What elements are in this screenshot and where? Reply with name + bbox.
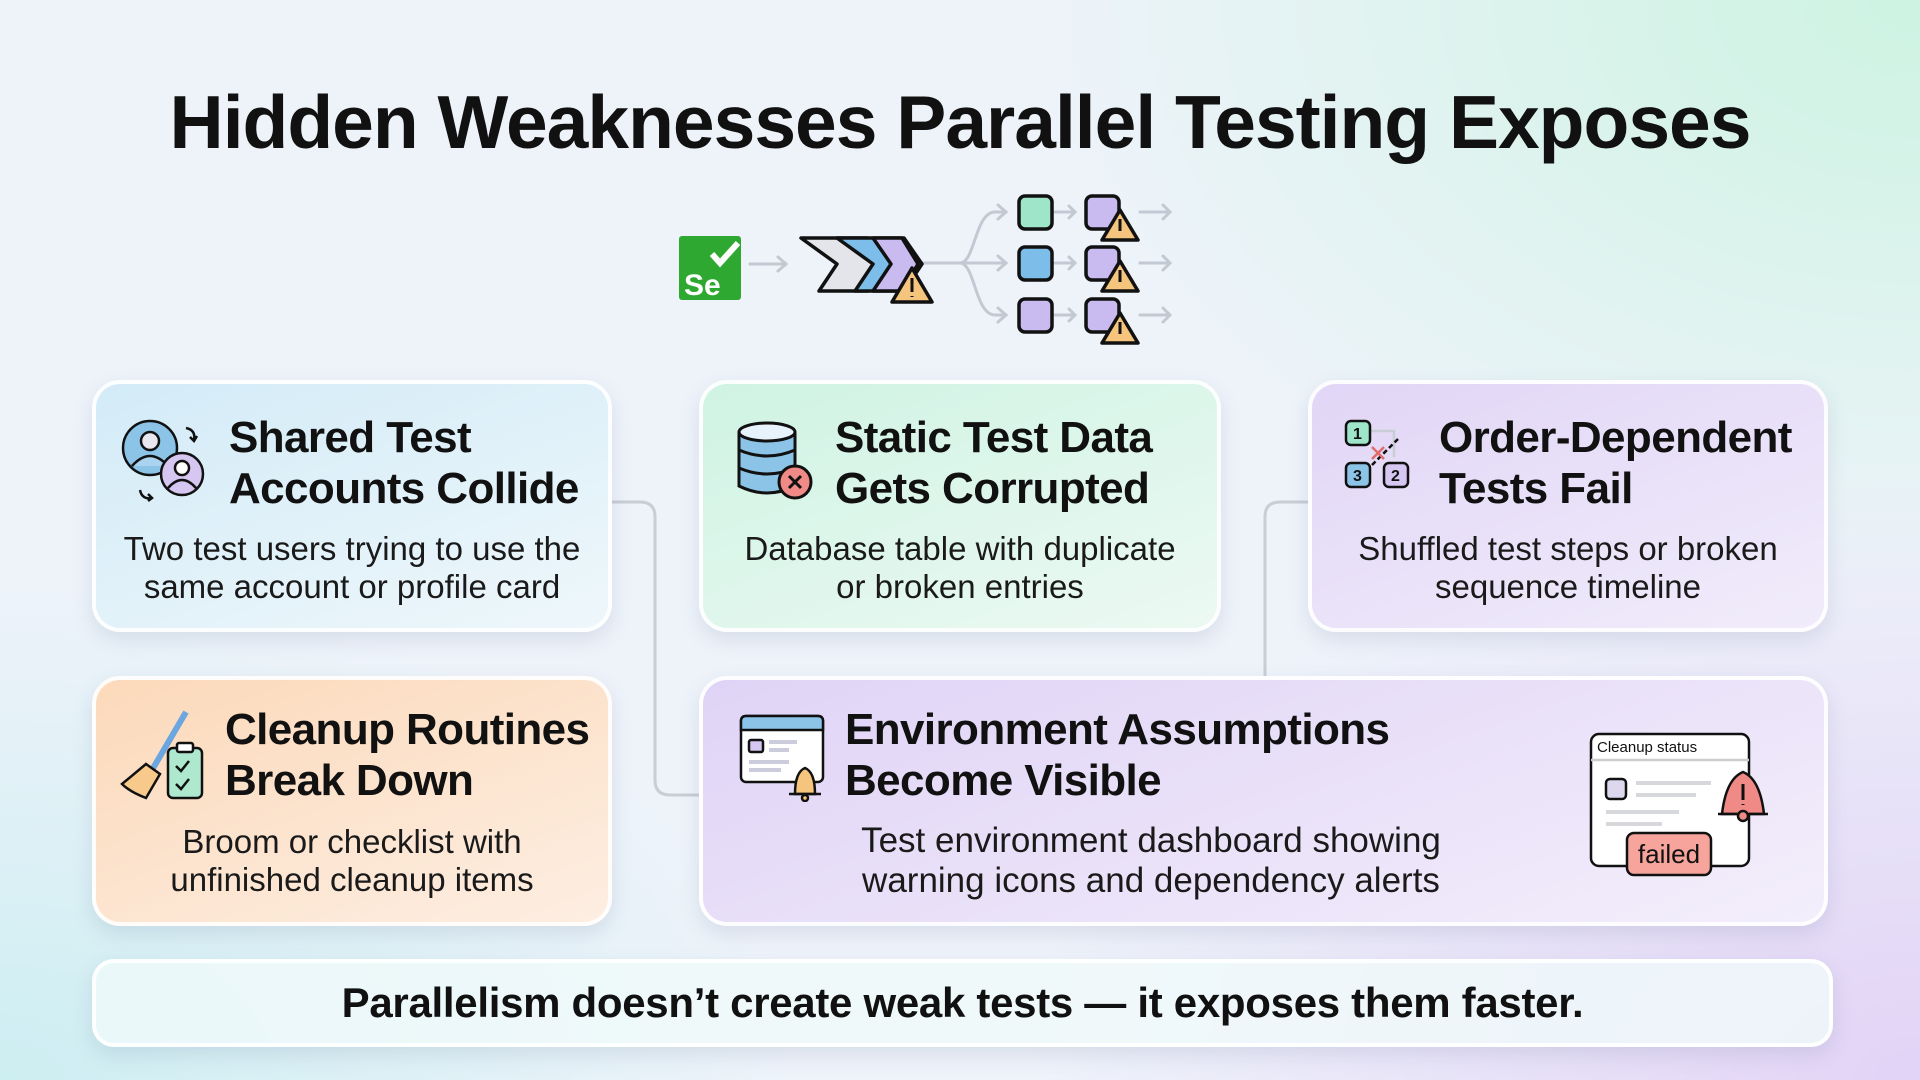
panel: shared test accounts xyxy=(92,380,612,632)
icon: shuffled steps: 2 xyxy=(1391,468,1400,485)
icon: parallel squares xyxy=(1019,196,1138,343)
heading: Become Visible xyxy=(845,756,1161,805)
heading: Order-Dependent xyxy=(1439,413,1792,462)
description xyxy=(744,530,1176,605)
heading: Gets Corrupted xyxy=(835,464,1149,513)
icon: dashboard with bell xyxy=(740,714,824,802)
heading xyxy=(229,413,579,513)
heading: Shared Test xyxy=(229,413,471,462)
panel: cleanup routines xyxy=(92,676,612,926)
icon: shuffled steps: 3 xyxy=(1353,468,1362,485)
heading: Environment Assumptions xyxy=(845,705,1389,754)
description: Broom or checklist with xyxy=(182,823,522,860)
description xyxy=(170,823,534,898)
description: unfinished cleanup items xyxy=(170,861,534,898)
description: Two test users trying to use the xyxy=(124,530,580,567)
description: sequence timeline xyxy=(1435,568,1701,605)
heading xyxy=(835,413,1154,513)
description xyxy=(1358,530,1778,605)
heading: Tests Fail xyxy=(1439,464,1633,513)
icon: chevrons xyxy=(801,238,932,302)
heading xyxy=(225,705,589,805)
icon: selenium logo xyxy=(679,236,741,302)
icon: users xyxy=(122,420,204,502)
icon: broom and checklist xyxy=(120,710,204,800)
callout: cleanup status failed xyxy=(1590,732,1768,876)
title: Hidden Weaknesses Parallel Testing Exposes xyxy=(170,80,1750,164)
description: Shuffled test steps or broken xyxy=(1358,530,1778,567)
heading xyxy=(845,705,1389,805)
heading xyxy=(1439,413,1792,513)
icon: shuffled steps: 1 xyxy=(1353,426,1362,443)
banner: conclusion xyxy=(92,959,1833,1047)
description: Database table with duplicate xyxy=(744,530,1176,567)
icon: shuffled steps xyxy=(1344,420,1410,488)
banner: conclusion: Parallelism doesn’t create weak tests — it exposes them faster. xyxy=(342,979,1583,1026)
heading: Accounts Collide xyxy=(229,464,579,513)
heading: Cleanup Routines xyxy=(225,705,589,754)
panel: order-dependent tests xyxy=(1308,380,1828,632)
description xyxy=(861,821,1441,900)
heading: Static Test Data xyxy=(835,413,1152,462)
heading: Break Down xyxy=(225,756,473,805)
panel: static test data xyxy=(699,380,1221,632)
panel: environment assumptions xyxy=(699,676,1828,926)
description: or broken entries xyxy=(836,568,1084,605)
icon: selenium logo: Se xyxy=(684,269,721,302)
callout: cleanup status failed: Cleanup status xyxy=(1597,739,1697,756)
flow diagram: parallel pipeline xyxy=(679,194,1172,345)
description xyxy=(124,530,580,605)
icon: database error xyxy=(738,422,812,500)
description: warning icons and dependency alerts xyxy=(862,861,1440,900)
description: Test environment dashboard showing xyxy=(861,821,1441,860)
description: same account or profile card xyxy=(144,568,560,605)
callout: cleanup status failed: failed xyxy=(1638,839,1700,869)
